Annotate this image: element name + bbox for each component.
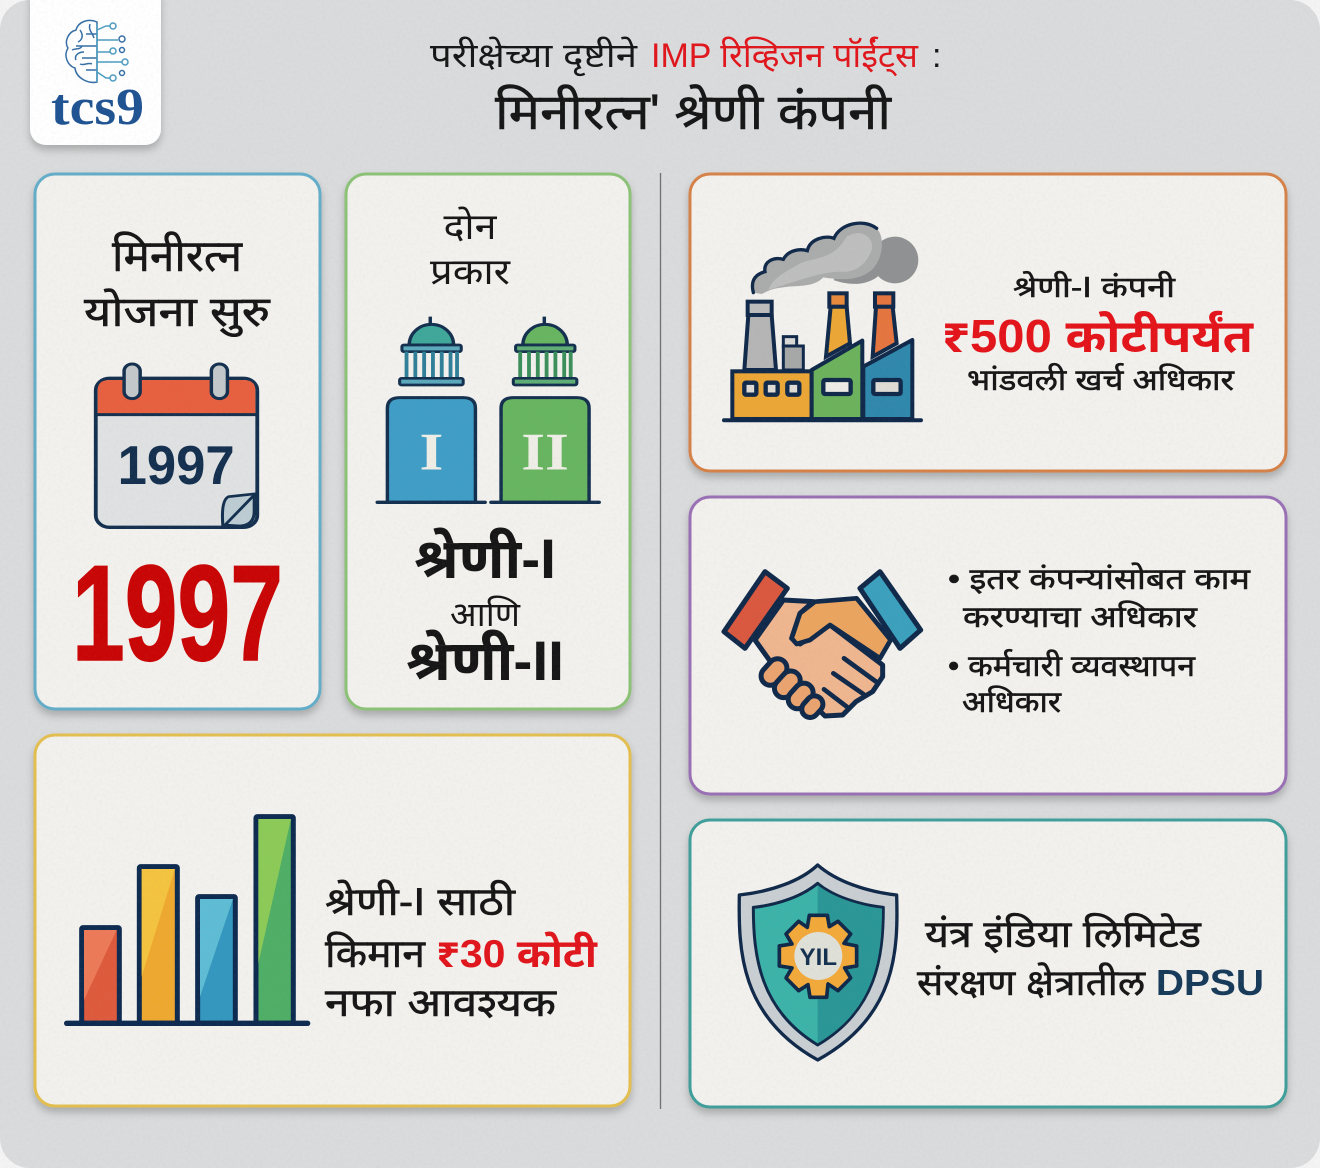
bar chart	[67, 817, 308, 1023]
title line 1: :	[932, 37, 941, 75]
label: category I: श्रेणी-I	[414, 527, 556, 590]
heading: scheme start line 2: योजना सुरु	[84, 288, 271, 337]
icon: two category buildings	[377, 317, 599, 502]
panel: YIL	[690, 820, 1286, 1107]
bullet 2 line 1: • कर्मचारी व्यवस्थापन	[948, 649, 1196, 683]
title line 1	[430, 36, 941, 77]
heading: two: दोन	[444, 206, 498, 247]
panel: capital expenditure	[690, 174, 1286, 471]
heading: types: प्रकार	[430, 251, 511, 292]
logo: tcs9	[30, 0, 161, 145]
panel: profit	[35, 735, 630, 1106]
logo wordmark: tcs9	[51, 79, 144, 136]
text: category I: श्रेणी-I साठी	[325, 880, 516, 924]
icon: shield: YIL	[800, 944, 837, 971]
icon: brain circuit	[66, 20, 128, 82]
bullet 1 line 2: करण्याचा अधिकार	[963, 600, 1198, 634]
icon: calendar: 1997	[118, 434, 235, 496]
label: and: आणि	[450, 596, 521, 634]
icon: handshake	[724, 572, 921, 721]
title line 2: मिनीरत्न' श्रेणी कंपनी	[495, 84, 892, 140]
text: capital expenditure authority: भांडवली खर्च अधिकार	[967, 363, 1235, 397]
text: 500 crore: ₹500 कोटीपर्यंत	[942, 310, 1255, 362]
label: category II: श्रेणी-II	[406, 629, 564, 692]
heading: scheme start: मिनीरत्न	[112, 231, 244, 281]
text: Yantra India Limited: यंत्र इंडिया लिमिटेड	[925, 912, 1202, 956]
bullet 1 line 1: • इतर कंपन्यांसोबत काम	[948, 562, 1251, 596]
text: minimum profit: किमान ₹30 कोटी	[325, 932, 599, 976]
panel: powers	[690, 497, 1286, 794]
bullet 2 line 2: अधिकार	[962, 685, 1062, 719]
panel: two types	[346, 174, 630, 709]
icon: factory	[724, 223, 921, 420]
text: required: नफा आवश्यक	[325, 982, 557, 1025]
text: defence DPSU: संरक्षण क्षेत्रातील DPSU	[917, 962, 1264, 1003]
panel: year 1997	[35, 174, 320, 709]
icon: shield	[739, 865, 897, 1060]
big year: 1997	[72, 537, 283, 689]
icon: calendar	[96, 364, 257, 527]
title line 1: परीक्षेच्या दृष्टीने	[430, 36, 638, 77]
title line 1: IMP रिव्हिजन पॉईंट्स	[651, 36, 919, 76]
text: category I company: श्रेणी-I कंपनी	[1013, 271, 1176, 304]
icon: two category buildings: I	[419, 423, 443, 481]
icon: two category buildings: II	[521, 423, 569, 481]
